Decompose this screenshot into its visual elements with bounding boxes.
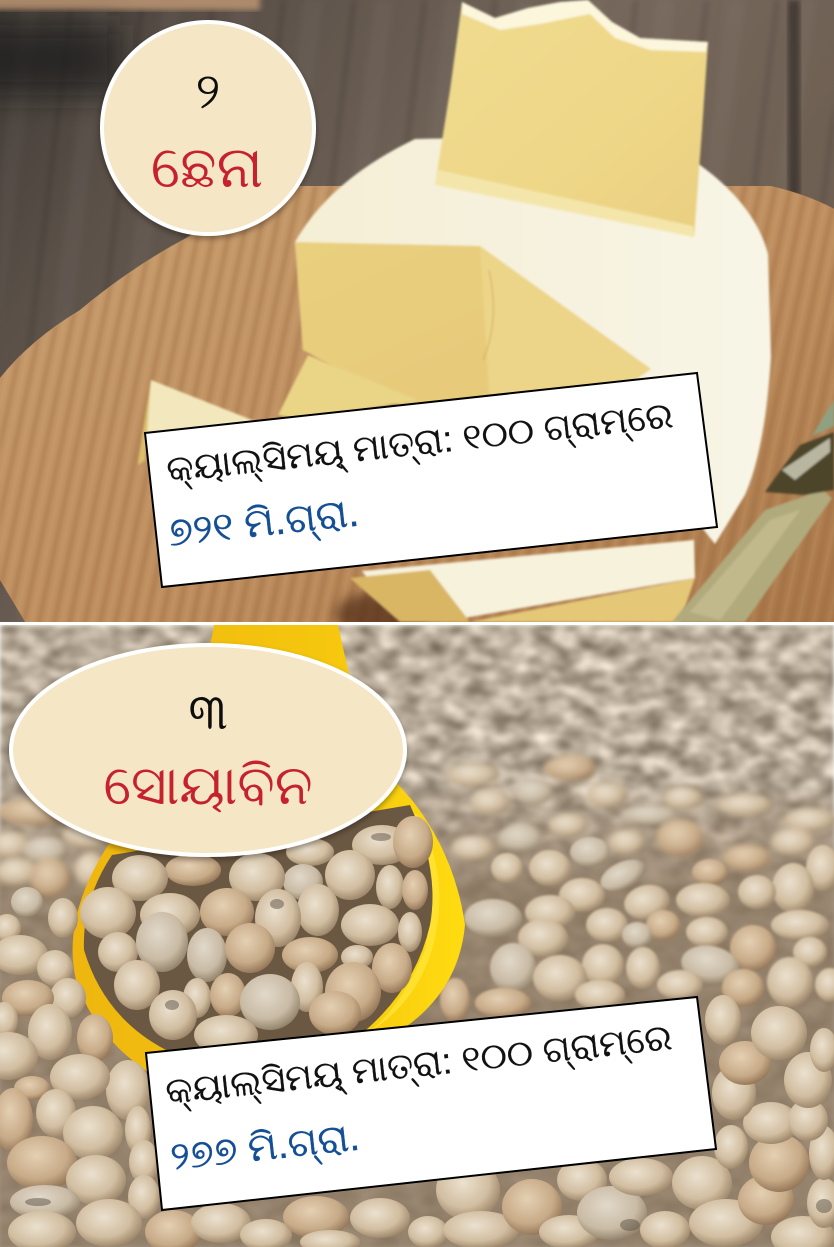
large paneer block xyxy=(295,139,771,544)
photo background: wooden table xyxy=(0,0,834,622)
divider line between photos xyxy=(0,622,834,625)
panel: soybean photo xyxy=(0,625,834,1247)
item number: ୨ xyxy=(196,63,220,119)
callout: soybean calcium xyxy=(146,997,716,1210)
item name: ଛେନା xyxy=(151,135,263,200)
item name: ସୋୟାବିନ xyxy=(103,754,313,816)
top paneer wedge xyxy=(435,0,708,237)
calcium amount label: କ୍ୟାଲ୍‌ସିମୟ୍ ମାତ୍ରା: ୧୦୦ ଗ୍ରାମ୍‌ରେ xyxy=(164,394,675,492)
callout: paneer calcium xyxy=(145,373,717,587)
calcium amount value: ୨୭୭ ମି.ଗ୍ରା. xyxy=(168,1116,362,1181)
darker bean bed xyxy=(0,770,834,1247)
blurred mid-distance soybeans xyxy=(0,755,834,898)
wooden plate xyxy=(0,186,834,639)
calcium amount value: ୭୨୧ ମି.ଗ୍ରା. xyxy=(166,491,361,557)
knife xyxy=(672,400,834,622)
mid-right soybeans xyxy=(440,837,834,1022)
item number: ୩ xyxy=(188,684,228,740)
panel: paneer photo xyxy=(0,0,834,639)
badge: number 3 soybean xyxy=(11,645,405,855)
scattered foreground soybeans xyxy=(0,887,834,1247)
small paneer pieces xyxy=(138,355,695,622)
calcium amount label: କ୍ୟାଲ୍‌ସିମୟ୍ ମାତ୍ରା: ୧୦୦ ଗ୍ରାମ୍‌ରେ xyxy=(163,1016,674,1114)
soybeans in spoon xyxy=(80,816,433,1055)
badge: number 2 paneer xyxy=(102,22,314,234)
yellow spoon xyxy=(73,625,465,1080)
blurred far beans xyxy=(0,625,834,1247)
